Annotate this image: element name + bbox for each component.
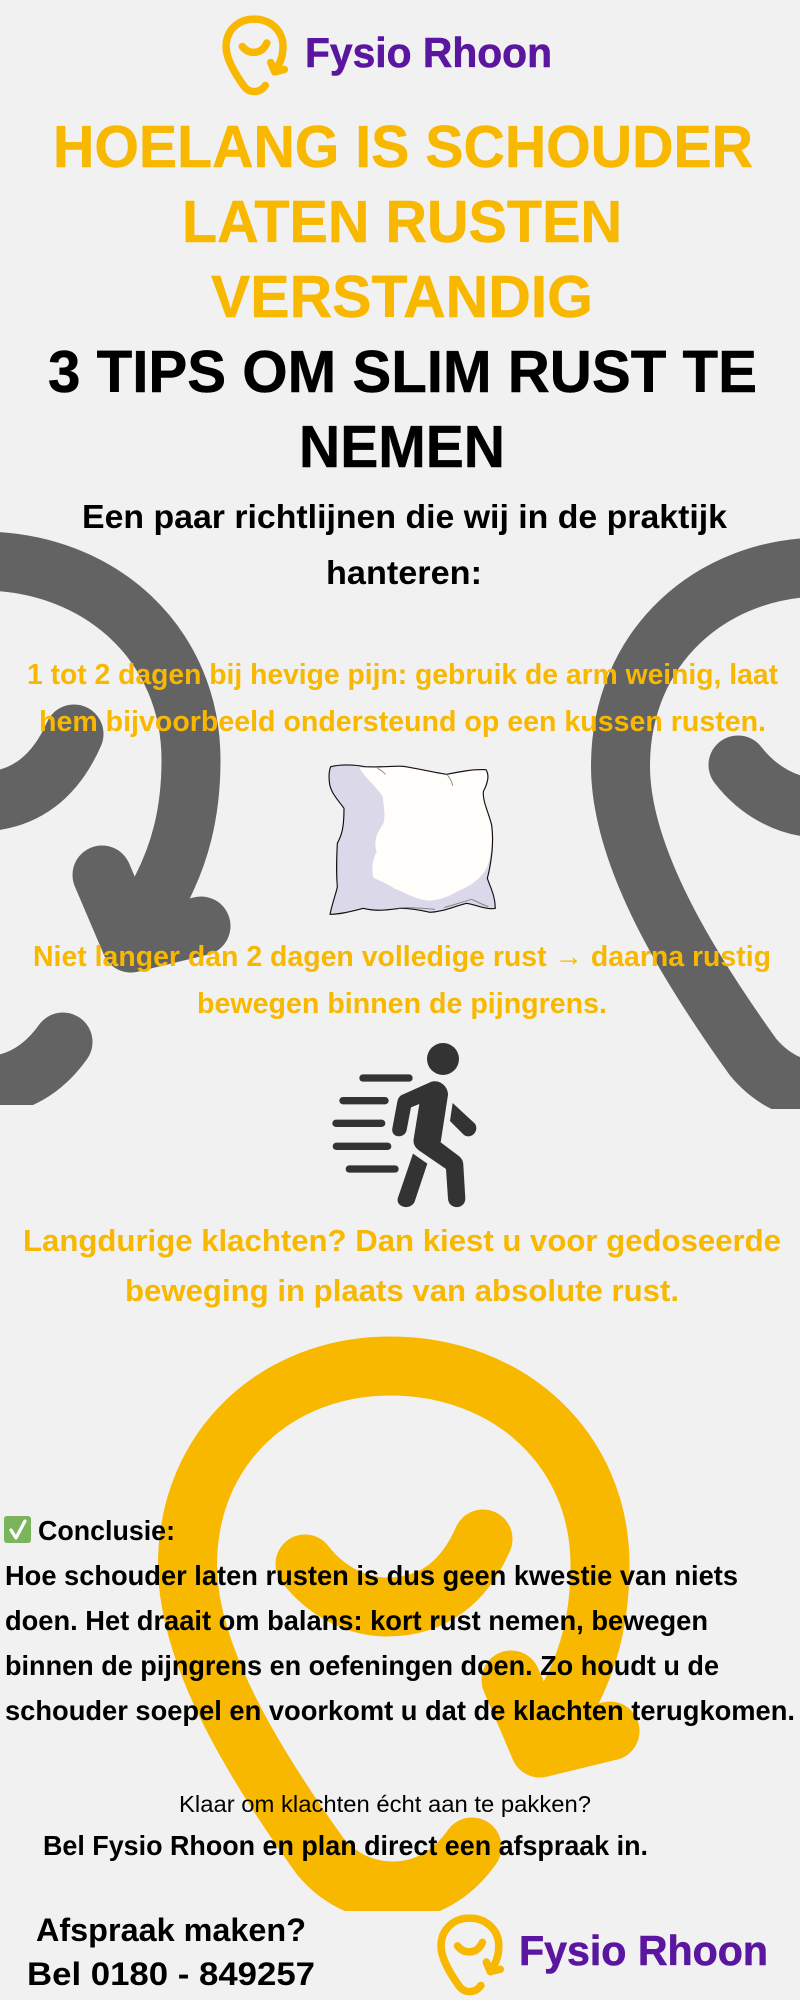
conclusion paragraph: binnen de pijngrens en oefeningen doen. Zo houdt u de: [5, 1650, 719, 1681]
conclusion paragraph: Hoe schouder laten rusten is dus geen kwestie van niets: [5, 1560, 738, 1591]
title: yellow heading: HOELANG IS SCHOUDER: [53, 114, 753, 180]
decorative large yellow ear icon: [188, 1366, 610, 1891]
intro text: Een paar richtlijnen die wij in de praktijk: [82, 498, 728, 535]
icon: pillow: [329, 765, 495, 914]
icon: green check mark: [4, 1516, 31, 1543]
tip 3 text: [23, 1223, 781, 1308]
logo wordmark top: Fysio Rhoon: [305, 29, 552, 76]
conclusion paragraph: [5, 1560, 795, 1726]
tip 3 text: beweging in plaats van absolute rust.: [125, 1273, 679, 1308]
contact text: Bel 0180 - 849257: [27, 1956, 315, 1992]
call to action text: Bel Fysio Rhoon en plan direct een afspraak in.: [43, 1830, 648, 1861]
title: yellow heading: VERSTANDIG: [211, 264, 593, 330]
conclusion heading: Conclusie:: [38, 1515, 175, 1546]
decorative grey ear icon: left: [0, 561, 201, 1086]
intro text: [82, 498, 728, 591]
call to action text: Klaar om klachten écht aan te pakken?: [179, 1791, 591, 1817]
tip 2 text: Niet langer dan 2 dagen volledige rust → daarna rustig: [33, 941, 771, 973]
tip 1 text: hem bijvoorbeeld ondersteund op een kussen rusten.: [39, 706, 766, 738]
contact text: Afspraak maken?: [36, 1912, 306, 1948]
tip 2 text: [33, 941, 771, 1020]
intro text: hanteren:: [326, 554, 482, 591]
logo: top Fysio Rhoon: [226, 19, 552, 92]
subtitle: black heading: [48, 339, 757, 480]
tip 3 text: Langdurige klachten? Dan kiest u voor gedoseerde: [23, 1223, 781, 1258]
conclusion paragraph: schouder soepel en voorkomt u dat de klachten terugkomen.: [5, 1695, 795, 1726]
call to action text: [43, 1791, 648, 1861]
contact text: [27, 1912, 315, 1992]
title: yellow heading: LATEN RUSTEN: [182, 189, 622, 255]
icon: ear logo bottom: [441, 1918, 500, 1992]
subtitle: black heading: 3 TIPS OM SLIM RUST TE: [48, 339, 757, 405]
conclusion paragraph: doen. Het draait om balans: kort rust nemen, bewegen: [5, 1605, 708, 1636]
subtitle: black heading: NEMEN: [299, 414, 505, 480]
logo: bottom Fysio Rhoon: [441, 1918, 768, 1992]
title: yellow heading: [53, 114, 753, 330]
icon: walking person with speed lines: [332, 1043, 476, 1207]
tip 1 text: 1 tot 2 dagen bij hevige pijn: gebruik de arm weinig, laat: [27, 659, 778, 691]
conclusion block: [4, 1515, 795, 1726]
tip 1 text: [27, 659, 778, 738]
icon: ear logo top: [226, 19, 284, 92]
tip 2 text: bewegen binnen de pijngrens.: [197, 988, 607, 1020]
logo wordmark bottom: Fysio Rhoon: [519, 1927, 768, 1974]
decorative grey ear icon: right: [620, 567, 800, 1092]
